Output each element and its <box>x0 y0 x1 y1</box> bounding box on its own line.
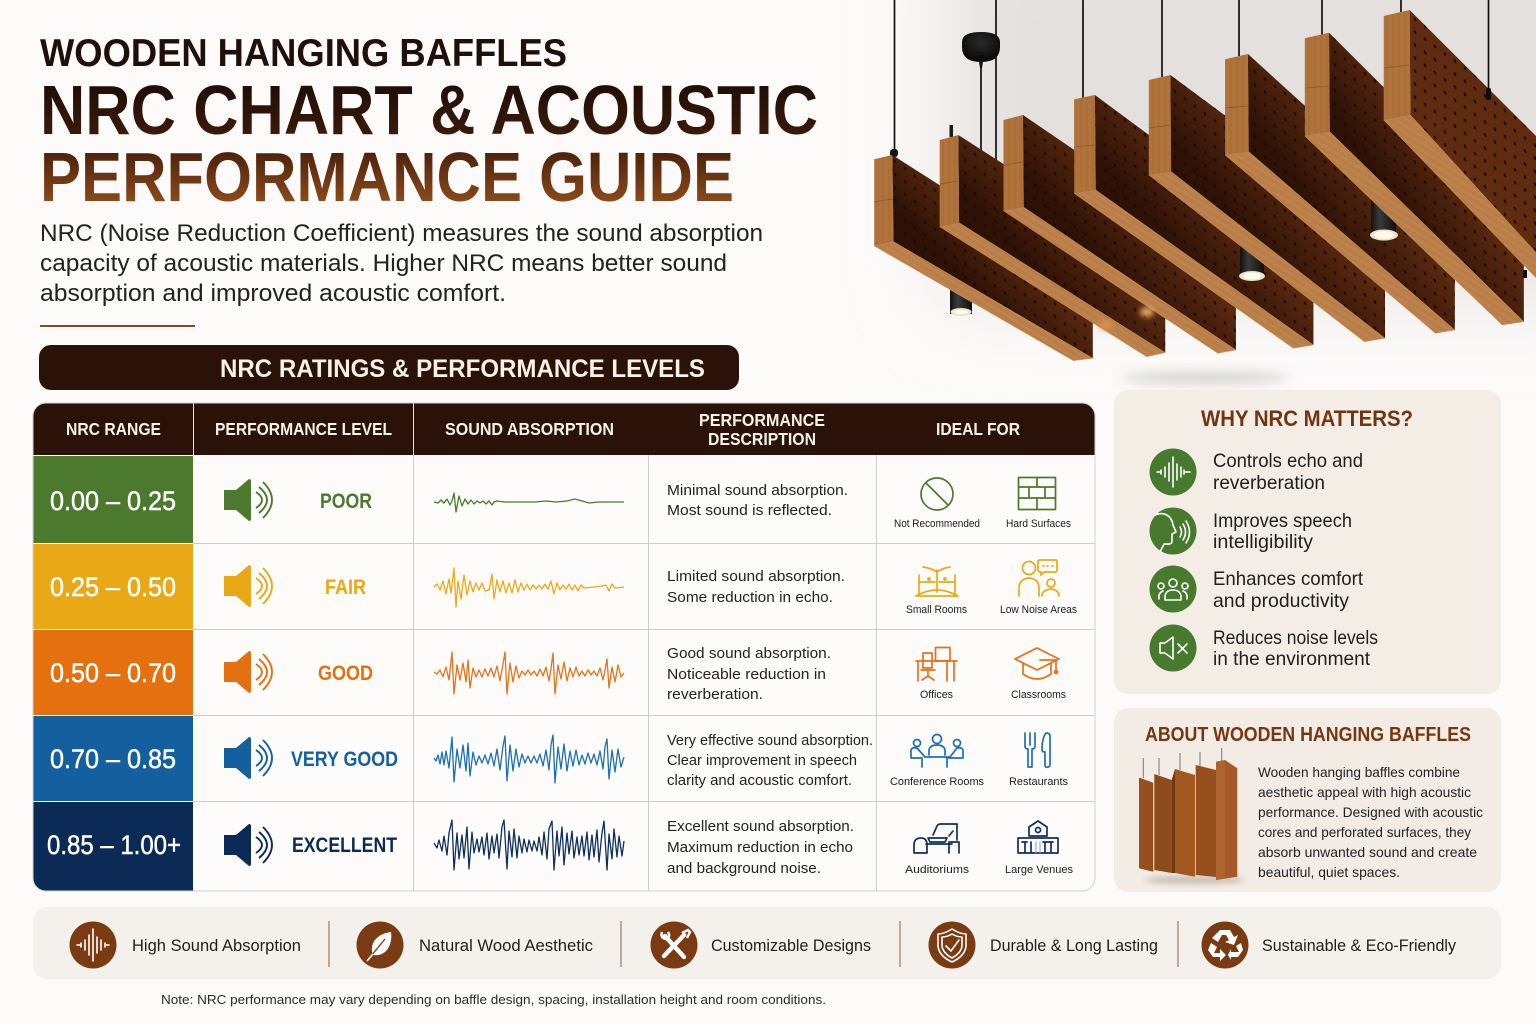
icon: speaker excellent <box>224 824 272 866</box>
section banner: NRC RATINGS & PERFORMANCE LEVELS <box>220 355 705 383</box>
feature: high sound absorption: High Sound Absorption <box>132 936 301 955</box>
NRC range values: 0.50 – 0.70 <box>50 658 176 688</box>
icon: speaker good <box>224 651 272 693</box>
body text: absorb unwanted sound and create <box>1258 844 1477 860</box>
waveform very good <box>434 735 624 783</box>
table header: IDEAL FOR <box>936 419 1020 439</box>
illustration: baffles <box>1139 748 1245 884</box>
ideal-for labels: Large Venues <box>1005 864 1074 876</box>
body text: cores and perforated surfaces, they <box>1258 824 1471 840</box>
item: controls echo: reverberation <box>1213 472 1325 494</box>
feature: durable <box>928 922 1158 968</box>
waveform fair <box>434 568 624 607</box>
ideal-for labels: Low Noise Areas <box>1000 604 1077 616</box>
item: speech: Improves speech <box>1213 510 1352 532</box>
feature: natural wood aesthetic: Natural Wood Aesthetic <box>419 936 593 955</box>
intro paragraph <box>40 220 763 307</box>
performance descriptions: Some reduction in echo. <box>667 589 833 606</box>
performance descriptions: and background noise. <box>667 860 821 877</box>
performance descriptions: Maximum reduction in echo <box>667 839 853 856</box>
icon: speaker fair <box>224 565 272 607</box>
item: speech <box>1150 508 1352 554</box>
icon: low noise areas <box>1019 560 1059 596</box>
feature: sustainable: Sustainable & Eco-Friendly <box>1262 936 1456 955</box>
icon: speaker poor <box>224 479 272 521</box>
hero photo: hanging wooden baffles <box>874 0 1536 383</box>
ideal-for labels: Conference Rooms <box>890 776 984 788</box>
NRC range values: 0.85 – 1.00+ <box>47 830 181 860</box>
heading: ABOUT WOODEN HANGING BAFFLES <box>1145 723 1471 746</box>
table header: PERFORMANCE LEVEL <box>215 419 392 439</box>
title line 2: NRC CHART & ACOUSTIC <box>40 71 818 149</box>
item: controls echo <box>1150 448 1363 496</box>
icon: hard surfaces <box>1018 478 1056 510</box>
ideal-for labels: Offices <box>920 689 953 701</box>
body text: beautiful, quiet spaces. <box>1258 864 1400 880</box>
table header: SOUND ABSORPTION <box>445 419 614 439</box>
performance level labels: EXCELLENT <box>292 834 397 857</box>
item: speech: intelligibility <box>1213 531 1313 553</box>
ideal-for labels: Auditoriums <box>905 864 970 876</box>
ideal-for labels: Small Rooms <box>906 604 967 616</box>
performance descriptions: clarity and acoustic comfort. <box>667 772 852 789</box>
table header <box>66 410 1020 449</box>
intro paragraph: capacity of acoustic materials. Higher NRC means better sound <box>40 250 727 277</box>
NRC range values <box>47 486 181 860</box>
item: comfort: Enhances comfort <box>1213 568 1364 590</box>
performance descriptions: Good sound absorption. <box>667 645 831 662</box>
performance level labels: POOR <box>320 490 372 513</box>
icon: classrooms <box>1015 648 1059 679</box>
waveform good <box>434 652 624 694</box>
performance descriptions: Excellent sound absorption. <box>667 818 854 835</box>
section banner <box>39 345 739 390</box>
icon: speaker very good <box>224 737 272 779</box>
feature: customizable designs <box>650 922 871 968</box>
performance descriptions: Clear improvement in speech <box>667 752 857 769</box>
intro paragraph: NRC (Noise Reduction Coefficient) measures the sound absorption <box>40 220 763 247</box>
performance level labels <box>291 490 398 857</box>
NRC range values: 0.00 – 0.25 <box>50 486 176 516</box>
performance descriptions <box>667 482 873 877</box>
icon: conference rooms <box>911 734 963 767</box>
performance descriptions: Limited sound absorption. <box>667 568 845 585</box>
performance descriptions: Noticeable reduction in <box>667 666 826 683</box>
feature bar <box>33 907 1501 979</box>
panel: about wooden hanging baffles <box>1114 708 1501 892</box>
item: controls echo: Controls echo and <box>1213 450 1363 472</box>
feature: durable: Durable & Long Lasting <box>990 936 1158 955</box>
item: noise: in the environment <box>1213 648 1371 670</box>
performance level labels: VERY GOOD <box>291 748 398 771</box>
panel: why NRC matters <box>1114 390 1501 694</box>
icon: auditoriums <box>914 824 959 853</box>
icon: small rooms <box>916 567 958 596</box>
performance descriptions: Most sound is reflected. <box>667 502 832 519</box>
performance level labels: GOOD <box>318 662 373 685</box>
icon: offices <box>916 648 957 681</box>
footnote: Note: NRC performance may vary depending on baffle design, spacing, installation height and room conditions. <box>161 992 826 1007</box>
table header: PERFORMANCE <box>699 410 825 430</box>
body text <box>1258 764 1483 880</box>
ideal-for labels: Not Recommended <box>894 518 980 530</box>
icon: large venues <box>1018 821 1058 853</box>
item: noise: Reduces noise levels <box>1213 627 1378 649</box>
NRC range values: 0.25 – 0.50 <box>50 572 176 602</box>
icon: restaurants <box>1025 733 1050 767</box>
body text: performance. Designed with acoustic <box>1258 804 1483 820</box>
waveform excellent <box>434 820 624 870</box>
ideal-for labels: Classrooms <box>1011 689 1066 701</box>
intro paragraph: absorption and improved acoustic comfort. <box>40 280 506 307</box>
performance descriptions: Minimal sound absorption. <box>667 482 848 499</box>
icon: not recommended <box>921 478 953 510</box>
waveform poor <box>434 493 624 512</box>
item: comfort <box>1150 566 1364 612</box>
body text: Wooden hanging baffles combine <box>1258 764 1460 780</box>
feature: natural wood aesthetic <box>356 922 593 968</box>
heading: WHY NRC MATTERS? <box>1201 406 1413 431</box>
title line 3: PERFORMANCE GUIDE <box>40 138 734 216</box>
feature: sustainable <box>1202 922 1456 968</box>
NRC ratings table <box>33 403 1095 891</box>
ideal-for labels: Restaurants <box>1009 776 1068 788</box>
table header: DESCRIPTION <box>708 429 816 449</box>
table header: NRC RANGE <box>66 419 161 439</box>
title block <box>40 32 818 216</box>
performance descriptions: Very effective sound absorption. <box>667 732 873 749</box>
NRC range values: 0.70 – 0.85 <box>50 744 176 774</box>
feature: high sound absorption <box>70 922 301 968</box>
ideal-for labels: Hard Surfaces <box>1006 518 1071 530</box>
item: noise <box>1150 624 1378 672</box>
body text: aesthetic appeal with high acoustic <box>1258 784 1471 800</box>
feature: customizable designs: Customizable Designs <box>711 936 871 955</box>
item: comfort: and productivity <box>1213 590 1349 612</box>
performance descriptions: reverberation. <box>667 686 763 703</box>
title line 1: WOODEN HANGING BAFFLES <box>40 32 567 75</box>
ideal-for labels <box>890 518 1077 876</box>
performance level labels: FAIR <box>325 576 366 599</box>
